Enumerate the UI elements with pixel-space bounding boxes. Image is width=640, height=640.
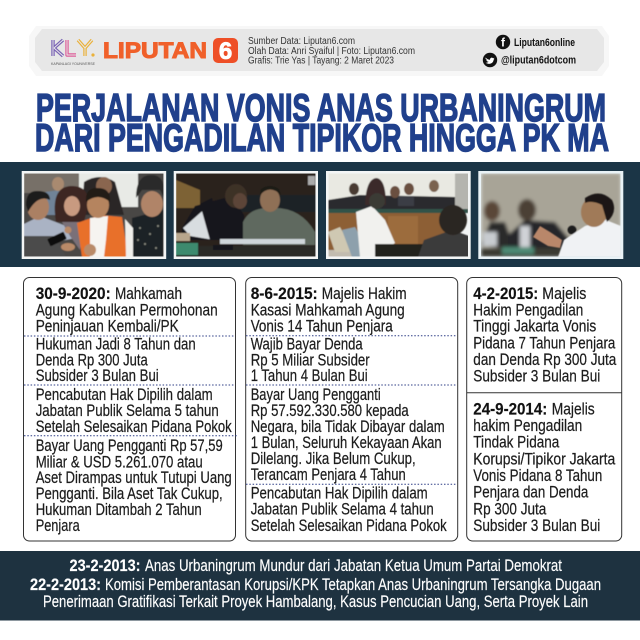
text block: 22-2-2013 bbox=[30, 575, 601, 611]
text block: high court 4-2-2015: Subsider 3 Bulan Bui bbox=[473, 368, 600, 386]
header band bbox=[29, 26, 609, 76]
text block: high court 4-2-2015 bbox=[473, 285, 617, 386]
text block: PK decision: Bayar Uang Pengganti Rp 57,59 bbox=[36, 437, 223, 455]
text block: 23-2-2013: 23-2-2013: bbox=[70, 556, 140, 575]
text block: high court 4-2-2015: Majelis bbox=[542, 285, 586, 303]
text block: cassation decision: Majelis Hakim bbox=[322, 285, 407, 303]
text block: cassation decision bbox=[251, 285, 447, 535]
text block: cassation decision: Negara, bila Tidak Dibayar dalam bbox=[251, 418, 445, 436]
text block: Tipikor court 24-9-2014: 24-9-2014: bbox=[473, 400, 547, 418]
text block: PK decision: Subsider 3 Bulan Bui bbox=[36, 367, 159, 385]
text block: Tipikor court 24-9-2014: Rp 300 Juta bbox=[473, 500, 547, 518]
text block: PK decision bbox=[36, 285, 232, 535]
source credits bbox=[248, 36, 415, 66]
text block: PK decision: Denda Rp 300 Juta bbox=[36, 351, 148, 369]
photo 2: Anas with lawyer at courtroom desk bbox=[174, 171, 318, 259]
text block: PK decision: Aset Dirampas untuk Tutupi Uang bbox=[36, 469, 232, 487]
text block: PK decision: Pengganti. Bila Aset Tak Cukup, bbox=[36, 485, 223, 503]
text block: Tipikor court 24-9-2014: Vonis Pidana 8 Tahun bbox=[473, 467, 602, 485]
text block: cassation decision: Terancam Penjara 4 Tahun bbox=[251, 466, 406, 484]
text block: PK decision: Jabatan Publik Selama 5 tahun bbox=[36, 402, 219, 420]
text block: Tipikor court 24-9-2014 bbox=[473, 400, 616, 535]
text block: PK decision: Agung Kabulkan Permohonan bbox=[36, 302, 218, 320]
text block: cassation decision: Pencabutan Hak Dipilih dalam bbox=[251, 485, 428, 503]
text block: cassation decision: 1 Tahun 4 Bulan Bui bbox=[251, 367, 368, 385]
text block: PK decision: Hukuman Jadi 8 Tahun dan bbox=[36, 335, 196, 353]
footer band bbox=[0, 551, 640, 620]
text block: cassation decision: Jabatan Publik Selama 4 tahun bbox=[251, 501, 434, 519]
panel: PK ruling 30-9-2020 bbox=[24, 278, 237, 541]
text block: PK decision: 30-9-2020: bbox=[36, 285, 111, 303]
source credits: Grafis: Trie Yas | Tayang: 2 Maret 2023 bbox=[248, 56, 394, 66]
photo 4: Anas speaking with blurred judges behind bbox=[478, 171, 623, 259]
photo 1: Anas in orange vest surrounded by press bbox=[22, 171, 166, 259]
text block: cassation decision: Rp 57.592.330.580 kepada bbox=[251, 402, 409, 420]
text block: high court 4-2-2015: Tinggi Jakarta Vonis bbox=[473, 318, 596, 336]
text block: high court 4-2-2015: Hakim Pengadilan bbox=[473, 302, 583, 320]
logo: Liputan 6: LIPUTAN bbox=[103, 38, 207, 63]
text block: Tipikor court 24-9-2014: Tindak Pidana bbox=[473, 434, 560, 452]
social: facebook: f bbox=[501, 36, 506, 50]
logo: Liputan 6: 6 bbox=[219, 38, 232, 65]
text block: cassation decision: 8-6-2015: bbox=[251, 285, 318, 303]
text block: Tipikor court 24-9-2014: hakim Pengadilan bbox=[473, 417, 582, 435]
text block: PK decision: Penjara bbox=[36, 517, 80, 535]
text block: Tipikor court 24-9-2014: Subsider 3 Bulan Bui bbox=[473, 517, 600, 535]
logo: KLY bbox=[51, 40, 96, 66]
social: facebook bbox=[496, 35, 575, 50]
photo band bbox=[0, 162, 640, 267]
text block: cassation decision: Dilelang. Jika Belum Cukup, bbox=[251, 450, 416, 468]
text block: cassation decision: Kasasi Mahkamah Agung bbox=[251, 302, 405, 320]
panel: cassation ruling 8-6-2015 bbox=[246, 278, 458, 541]
text block: PK decision: Pencabutan Hak Dipilih dalam bbox=[36, 386, 213, 404]
text block: cassation decision: Vonis 14 Tahun Penjara bbox=[251, 318, 393, 336]
text block: cassation decision: Bayar Uang Pengganti bbox=[251, 386, 381, 404]
title bbox=[35, 87, 609, 160]
social: facebook: Liputan6online bbox=[514, 37, 575, 49]
text block: cassation decision: Setelah Selesaikan Pidana Pokok bbox=[251, 517, 447, 535]
source credits: Olah Data: Anri Syaiful | Foto: Liputan6.com bbox=[248, 46, 415, 57]
text block: Tipikor court 24-9-2014: Korupsi/Tipikor Jakarta bbox=[473, 450, 616, 468]
text block: cassation decision: Wajib Bayar Denda bbox=[251, 335, 363, 353]
text block: Tipikor court 24-9-2014: Penjara dan Denda bbox=[473, 484, 589, 502]
text block: cassation decision: 1 Bulan, Seluruh Kekayaan Akan bbox=[251, 434, 442, 452]
text block: Tipikor court 24-9-2014: Majelis bbox=[552, 400, 595, 418]
text block: PK decision: Setelah Selesaikan Pidana Pokok bbox=[36, 418, 232, 436]
social: twitter: @liputan6dotcom bbox=[501, 54, 576, 66]
text block: PK decision: Mahkamah bbox=[115, 285, 182, 303]
source credits: Sumber Data: Liputan6.com bbox=[248, 36, 355, 47]
text block: high court 4-2-2015: 4-2-2015: bbox=[473, 285, 538, 303]
social: twitter bbox=[483, 53, 576, 67]
logo: KLY: KAPANLAGI YOUNIVERSE bbox=[51, 62, 96, 66]
text block: PK decision: Hukuman Ditambah 2 Tahun bbox=[36, 501, 202, 519]
text block: PK decision: Peninjauan Kembali/PK bbox=[36, 318, 179, 336]
panel: high court and Tipikor rulings bbox=[467, 278, 622, 541]
text block: PK decision: Miliar & USD 5.261.070 atau bbox=[36, 454, 203, 472]
photo 3: defendant before the judges panel bbox=[326, 171, 471, 259]
text block: cassation decision: Rp 5 Miliar Subsider bbox=[251, 351, 370, 369]
text block: 22-2-2013: 22-2-2013: bbox=[30, 575, 101, 594]
logo: Liputan 6 bbox=[103, 38, 238, 65]
